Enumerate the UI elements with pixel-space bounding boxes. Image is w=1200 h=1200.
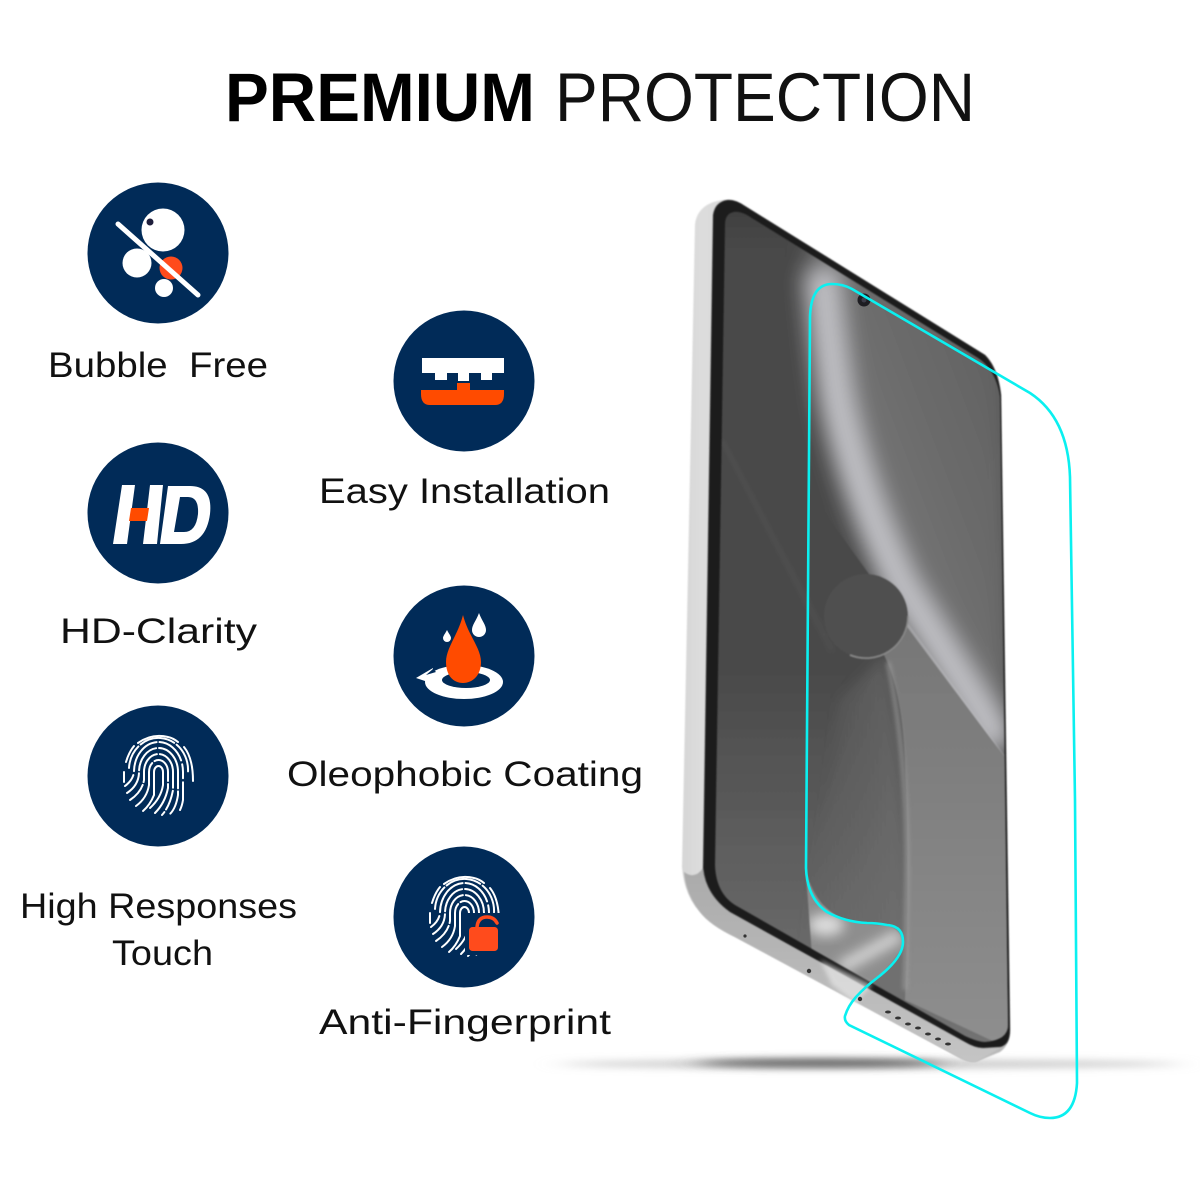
feature: Easy Installation: Easy Installation [319, 472, 610, 511]
feature: Oleophobic Coating: Oleophobic Coating [287, 755, 643, 794]
wallpaper curved highlight edge [888, 662, 907, 990]
feature: HD-Clarity [60, 442, 258, 651]
peeled film corner [806, 878, 902, 982]
phone [682, 200, 1020, 1062]
icon: fingerprint [124, 736, 193, 815]
screen [714, 212, 1009, 1043]
screen protector outline [806, 284, 1077, 1118]
feature: Bubble Free [48, 182, 268, 385]
title [225, 59, 975, 136]
lower right wallpaper [884, 618, 1012, 1050]
icon: fingerprint with lock [430, 877, 503, 956]
camera hole [858, 294, 870, 306]
title: PROTECTION [555, 59, 975, 136]
feature: High Responses Touch: Touch [112, 934, 213, 973]
dark disc [849, 574, 909, 660]
title: PREMIUM [225, 59, 535, 136]
feature: Oleophobic Coating [287, 586, 643, 794]
feature: Bubble Free: Bubble Free [48, 346, 268, 385]
frame bottom shading [684, 868, 1000, 1062]
feature: HD-Clarity: HD-Clarity [60, 612, 258, 651]
bottom port patch [820, 960, 872, 1003]
feature: Easy Installation [319, 310, 610, 511]
middle wallpaper lightening [842, 660, 902, 910]
black bezel [703, 200, 1010, 1048]
phone body frame [682, 200, 1010, 1062]
feature: Anti-Fingerprint: Anti-Fingerprint [319, 1003, 611, 1042]
ground shadow [560, 1059, 1180, 1068]
feature: Anti-Fingerprint [319, 846, 611, 1042]
wallpaper light sweep [808, 235, 1010, 770]
speaker and mic holes [743, 934, 951, 1046]
feature: High Responses Touch: High Responses [20, 887, 297, 926]
feature: High Responses Touch [20, 706, 297, 973]
faint diagonal wallpaper crease [722, 440, 832, 650]
